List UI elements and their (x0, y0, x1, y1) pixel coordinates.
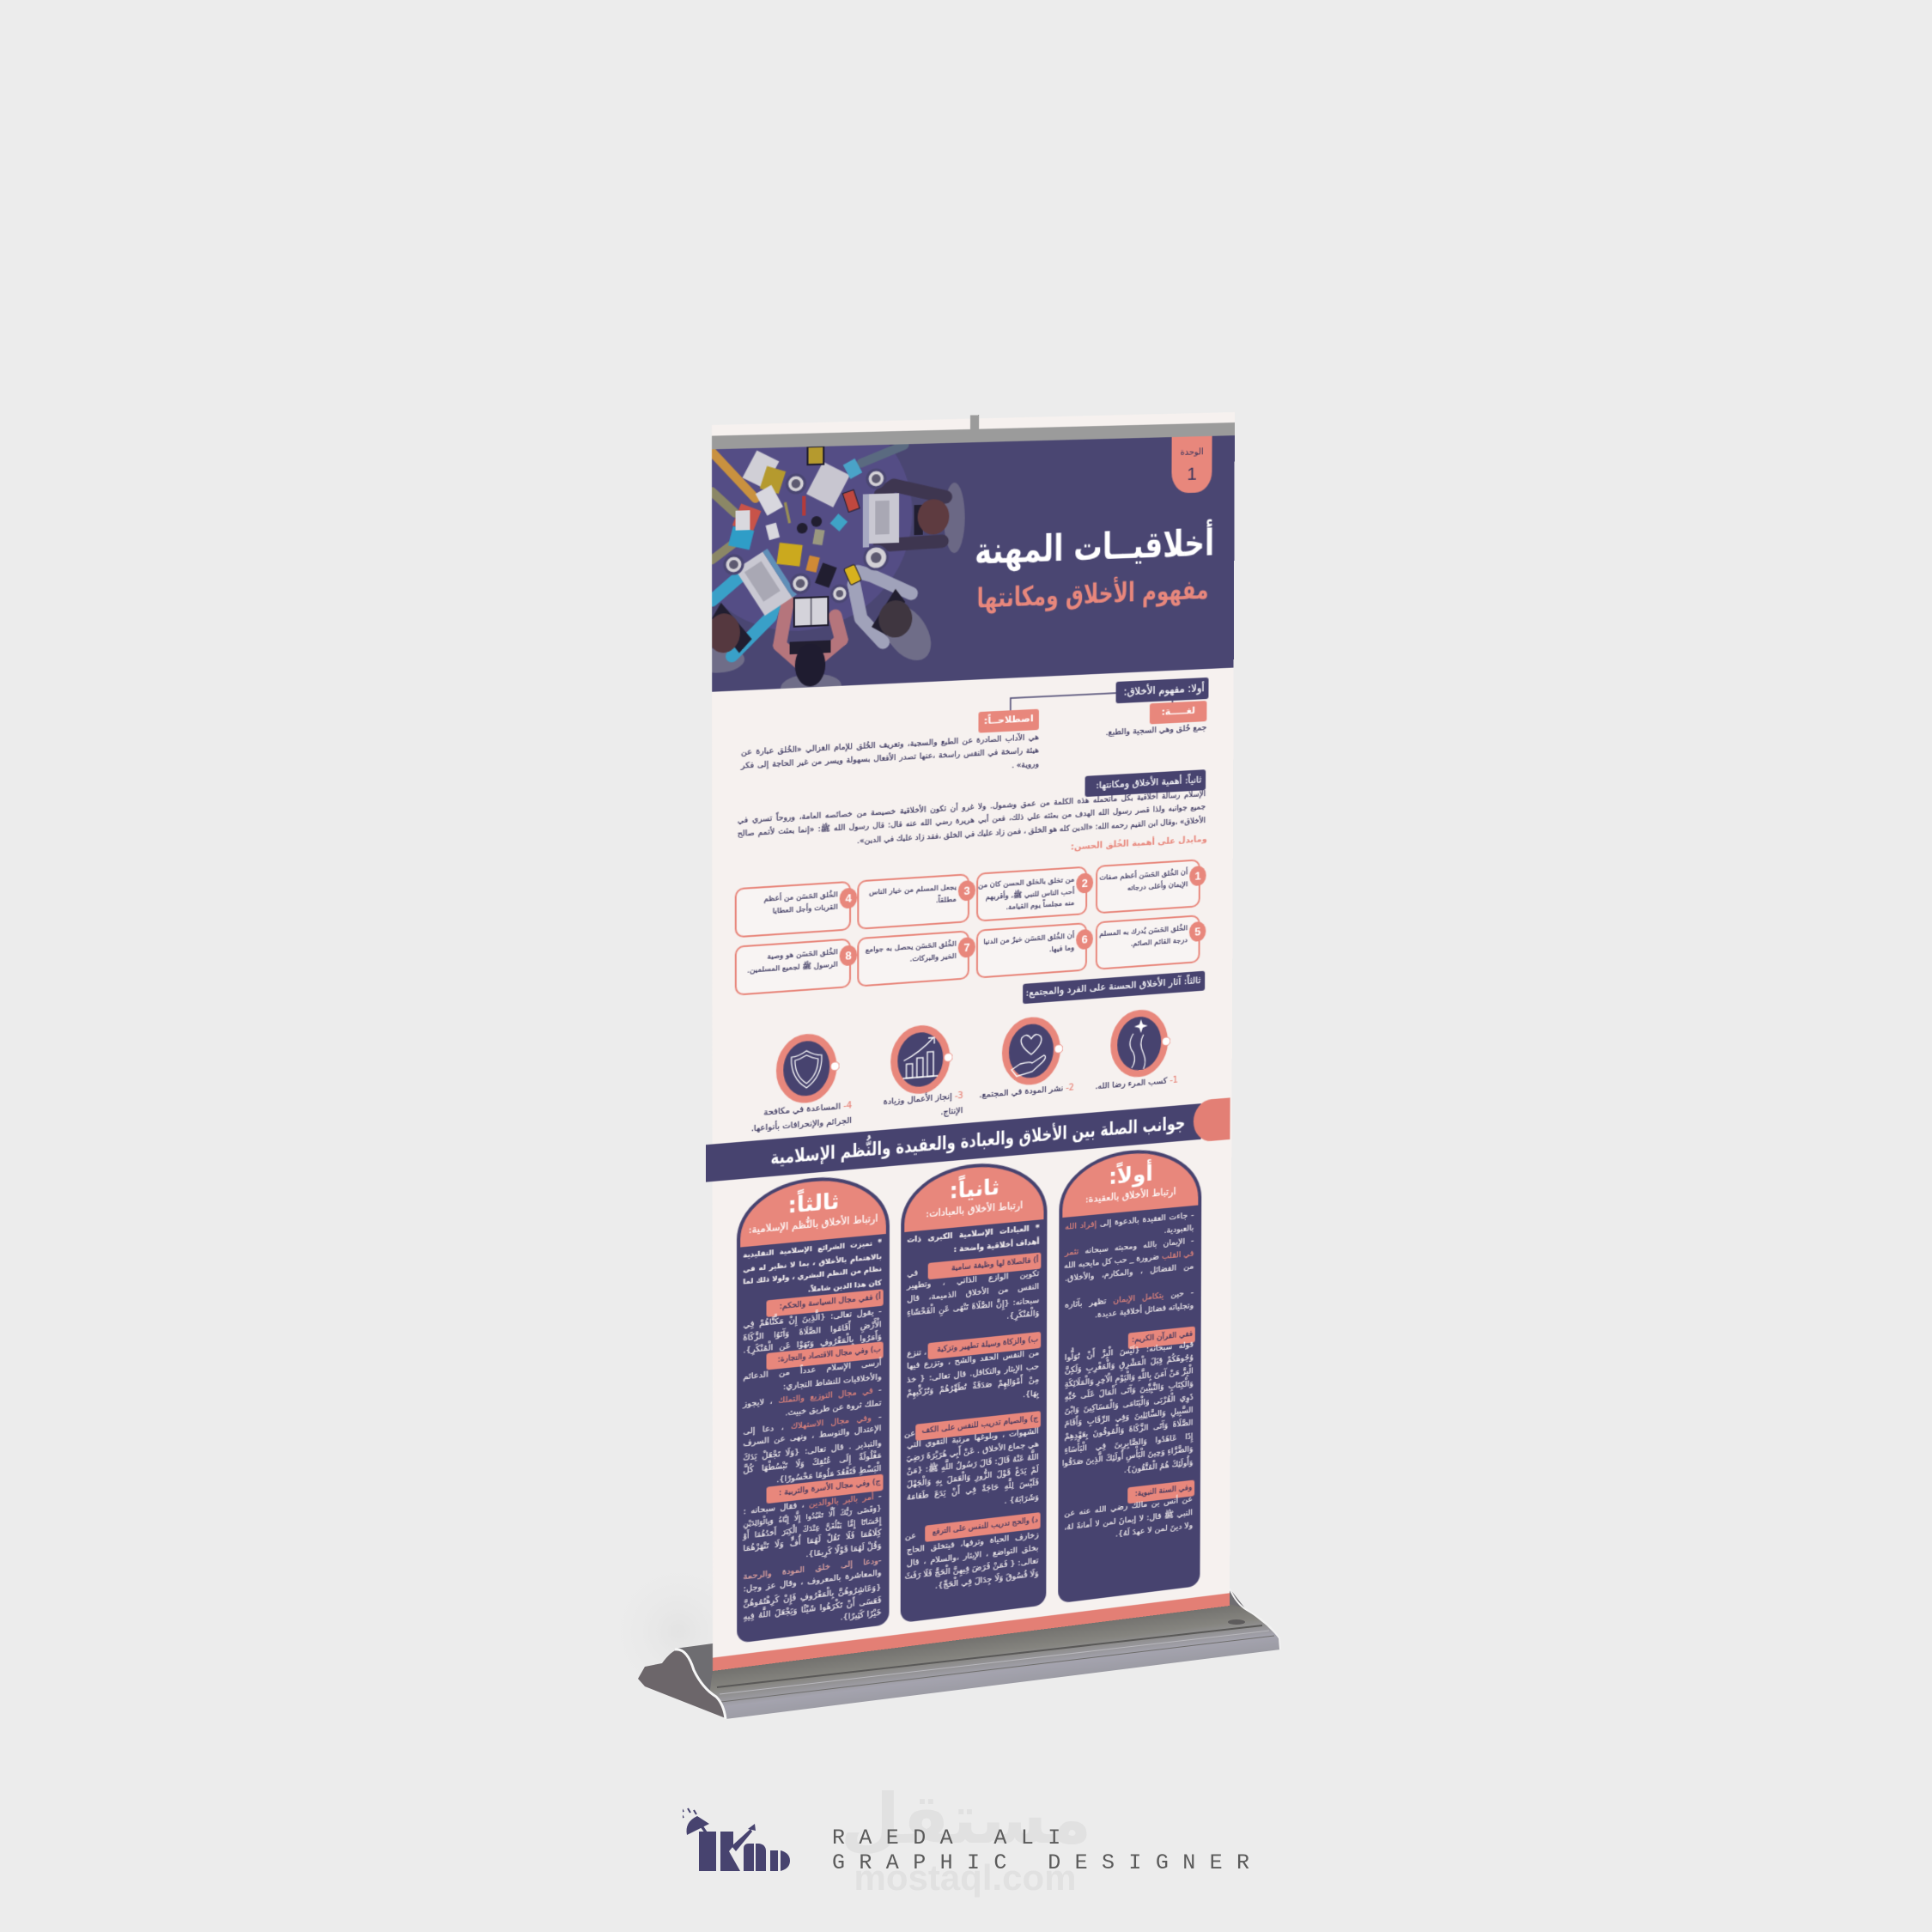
column 3: systems: -ودعا إلى خلق المودة والرحمة (743, 1556, 881, 1582)
column 1: creed: وتجلياته فضائل أخلاقية عديدة. (1095, 1301, 1194, 1321)
importance paragraph (737, 790, 1206, 846)
top rail (712, 422, 1235, 449)
label 4: الجرائم والإنحرافات بأنواعها. (751, 1116, 852, 1134)
person lower left (712, 575, 775, 657)
heading: section one (1116, 677, 1209, 703)
column 1: creed: - حين يتكامل الإيمان تظهر بآثاره (1065, 1288, 1194, 1310)
definition text: istilahan: هي الآداب الصادرة عن الطبع والسجية، وتعريف الخُلق للإمام الغزالي «الخُلق عبارة عن (741, 733, 1039, 757)
column 3: systems (737, 1171, 890, 1643)
box: quran (1128, 1327, 1195, 1349)
unit badge (1171, 436, 1212, 494)
bottom pink band (713, 1593, 1230, 1671)
column 1: creed: النبي ﷺ قال: لا إيمانَ لمن لا أمانةَ لهُ، (1064, 1508, 1193, 1533)
logo (683, 1808, 790, 1871)
box: family: ج) وفي مجال الأسرة والتربية : (779, 1478, 880, 1498)
column 1 header: ارتباط الأخلاق بالعقيدة: (1085, 1186, 1176, 1206)
arms (712, 445, 904, 560)
tag: lughatan: لغـــــة: (1162, 705, 1195, 718)
column 1: creed: وَالْكِتَابِ وَالنَّبِيِّينَ وَآتَى الْمَالَ عَلَى حُبِّهِ (1065, 1379, 1194, 1402)
box: prayer (928, 1253, 1041, 1279)
card 2 (976, 866, 1087, 922)
definition text: istilahan: وروية» . (1012, 760, 1039, 770)
column 2: worship: وَشَرَابَهُ} . (1005, 1492, 1039, 1506)
connector lines (1010, 692, 1174, 711)
column 2: worship: بخلق التواضع ، الإيثار ،والسلام ، قال (907, 1543, 1039, 1569)
column 1: creed: - جاءت العقيدة بالدعوة إلى إفراد الله (1065, 1211, 1194, 1232)
column 1: creed: في القلب ضرورة _ حب كل مايحبه الله (1064, 1249, 1194, 1271)
card 1: أن الخُلق الحَسَن أعظم صفات (1099, 867, 1188, 882)
column 3: systems: {وَقَضَى رَبُّكَ أَلَّا تَعْبُدُوا إِلَّا إِيَّاهُ وَبِالْوَالِدَيْنِ (743, 1504, 881, 1528)
column 2: worship: بِهَا}. (1023, 1388, 1039, 1400)
column 1: creed: وَالضَّرَّاءِ وَحِينَ الْبَأْسِ أُولَئِكَ الَّذِينَ صَدَقُوا (1062, 1444, 1193, 1468)
column 2: worship: زخارف الحياة وترفها، فيتخلق الحاج (907, 1530, 1039, 1556)
column 3: systems: {وَعَاشِرُوهُنَّ بِالْمَعْرُوفِ فَإِنْ كَرِهْتُمُوهُنَّ (743, 1583, 881, 1609)
top hanger notch (970, 415, 979, 431)
column 3 header: ارتباط الأخلاق بالنُّظم الإسلامية: (749, 1212, 878, 1236)
column 3: systems: إِحْسَانًا إِمَّا يَبْلُغَنَّ عِنْدَكَ الْكِبَرَ أَحَدُهُمَا أَوْ (743, 1516, 881, 1541)
column 2: worship: النفس من الأخلاق الذميمة، قال (907, 1282, 1039, 1304)
card 3: مطلقاً. (936, 894, 957, 904)
label 4: 4- المساعدة في مكافحة (763, 1101, 852, 1118)
column 2: worship: من النفس الحقد والشح ، وتزرع فيها (907, 1348, 1039, 1371)
banner (712, 412, 1235, 1671)
column 3: systems: بالاهتمام بالأخلاق ، بما لا نظير له في (743, 1252, 882, 1273)
box: fasting (915, 1411, 1041, 1441)
column 3: systems: الْبَسْطِ فَتَقْعُدَ مَلُومًا مَحْسُورًا}. (776, 1464, 881, 1485)
column 2: worship: أهداف أخلاقية واضحة : (954, 1238, 1039, 1255)
importance paragraph: جميع جوانبه ولذا قصر رسول الله الهدف من بعثته علي ذلك، فعن أبي هريرة رضي الله عنه قال: قال رسول الله ﷺ: «إنما بعثت لأتمم صالح (738, 803, 1206, 839)
tag: lughatan (1150, 701, 1206, 724)
person bottom (780, 597, 841, 670)
column 3: systems: * تميزت الشرائع الإسلامية التقليدية (743, 1237, 882, 1260)
card 5 (1096, 914, 1200, 970)
column 1: creed: ولا دينَ لمن لا عهدَ لَهُ}. (1115, 1521, 1193, 1540)
column 1: creed: الْبِرَّ مَنْ آمَنَ بِاللَّهِ وَالْيَوْمِ الْآخِرِ وَالْمَلَائِكَةِ (1065, 1366, 1194, 1389)
column 2: worship: تعالى: { فَمَنْ فَرَضَ فِيهِنَّ الْحَجَّ فَلَا رَفَثَ (904, 1556, 1039, 1582)
card 8: 8 (845, 949, 852, 963)
column 3: systems: نظام من النظم البشري ، ولولا ذلك لما (743, 1264, 882, 1286)
column 3: systems: - وفي مجال الاستهلاك ، دعا إلى (743, 1413, 882, 1437)
header panel (712, 435, 1235, 692)
label 2: 2- نشر المودة في المجتمع. (979, 1083, 1074, 1100)
column 2: worship: مِنْ أَمْوَالِهِمْ صَدَقَةً تُطَهِّرُهُمْ وَتُزَكِّيهِمْ (907, 1375, 1039, 1398)
column 2 header: ثانياً: (950, 1174, 999, 1204)
column 2: worship: سبحانه: {إِنَّ الصَّلَاةَ تَنْهَى عَنِ الْفَحْشَاءِ (907, 1296, 1039, 1318)
icon: growth chart (890, 1025, 953, 1094)
column 1: creed: الصَّلَاةَ وَآتَى الزَّكَاةَ وَالْمُوفُونَ بِعَهْدِهِمْ (1065, 1419, 1194, 1442)
card 6: 6 (1081, 933, 1088, 946)
card 8 (735, 939, 851, 996)
column 3: systems: وَقُلْ لَهُمَا قَوْلًا كَرِيمًا}. (805, 1541, 881, 1559)
column 3: systems: - أمر بالبر بالوالدين ، فقال سبحانه : (743, 1492, 881, 1517)
column 1: creed: قوله سبحانه: {لَيْسَ الْبِرَّ أَنْ تُوَلُّوا (1065, 1340, 1194, 1363)
column 1: creed: ذَوِي الْقُرْبَى وَالْيَتَامَى وَالْمَسَاكِينَ وَابْنَ (1065, 1393, 1194, 1416)
unit badge: 1 (1187, 464, 1197, 484)
column 3: systems: - في مجال التوزيع والتملك ، لايجوز (743, 1385, 882, 1409)
column 2: worship: اللَّهُ عَنْهُ قَالَ: قَالَ رَسُولُ اللَّهِ ﷺ: {مَنْ (907, 1452, 1039, 1477)
card 4 (735, 881, 851, 938)
column 2: worship: وَالْمُنْكَرِ}. (1006, 1309, 1039, 1321)
label 3 (883, 1073, 1151, 1118)
column 2 header: ارتباط الأخلاق بالعبادات: (926, 1200, 1023, 1220)
box: hajj (925, 1512, 1041, 1542)
column 3: systems: والمعاشرة بالمعروف ، وقال عز وجل: (743, 1568, 881, 1595)
box: family (767, 1474, 884, 1504)
watermark: mostaql: مستقل (841, 1779, 1091, 1859)
box: fasting: ج) والصيام تدريب للنفس على الكف (922, 1414, 1038, 1436)
column 3: systems: كان هذا الدين شاملاً. (808, 1278, 882, 1294)
box: politics: أ) ففي مجال السياسة والحكم: (780, 1293, 881, 1311)
card 4: الخُلق الحَسَن من أعظم (763, 890, 838, 903)
card 1: 1 (1194, 869, 1200, 883)
card 7: 7 (963, 940, 970, 954)
title: أخلاقيــات المهنة (975, 521, 1214, 573)
illustration: team around table (711, 444, 965, 689)
column 2: worship: تكوين الوازع الذاتي ، وتطهير (907, 1269, 1039, 1291)
card 2: 2 (1082, 877, 1088, 890)
column 3: systems: الإعتدال والتوسط ، ونهى عن السرف (743, 1424, 882, 1449)
ribbon pink cap (1194, 1097, 1230, 1143)
column 2: worship: فَلَيْسَ لِلَّهِ حَاجَةٌ فِي أَنْ يَدَعَ طَعَامَهُ (907, 1478, 1039, 1503)
card 3: 3 (963, 884, 970, 897)
heading: section one: أولا: مفهوم الأخلاق: (1124, 682, 1205, 698)
card 7: الخُلق الحَسَن يحصل به جوامع (866, 939, 957, 954)
box: quran: ففي القرآن الكريم: (1132, 1330, 1193, 1345)
column 3: systems: أرسى الإسلام عدداً من الدعائم (743, 1358, 882, 1382)
column 2 header (904, 1162, 1044, 1232)
tag: istilahan: اصطلاحــاً: (984, 713, 1034, 726)
label 1: 1- كسب المرء رضا الله. (1095, 1076, 1178, 1091)
pink subheading: ومايدل على أهمية الخُلق الحسن: (1071, 835, 1207, 853)
ribbon (706, 1103, 1201, 1182)
card 7: الخير والبركات. (910, 951, 957, 963)
column 3: systems: والأخلاقيات للنشاط التجاري: (783, 1372, 882, 1392)
column 1: creed (1058, 1145, 1202, 1603)
person right (878, 483, 945, 545)
column 3: systems: تملك ثروة عن طريق خبيث. (785, 1399, 882, 1419)
card 8: الخُلق الحَسَن هو وصية (767, 947, 838, 961)
watermark: mostaql (841, 1779, 1091, 1898)
box: sunnah: وفي السنة النبوية: (1135, 1484, 1192, 1498)
laptop lower left (735, 549, 797, 616)
column 3: systems: مَغْلُولَةً إِلَى عُنُقِكَ وَلَا تَبْسُطْهَا كُلَّ (743, 1450, 882, 1475)
column 1: creed: عن أنس بن مالك رضي الله عنه عن (1064, 1494, 1193, 1519)
column 1: creed: بالعبودية. (1164, 1224, 1194, 1236)
box: hajj: د) والحج تدريب للنفس على الترفع (933, 1516, 1038, 1537)
column 1: creed: إِذَا عَاهَدُوا وَالصَّابِرِينَ فِي الْبَأْسَاءِ (1065, 1431, 1193, 1455)
glasses (797, 516, 822, 534)
card 7 (857, 930, 969, 987)
column 2: worship: حب الإيثار والتكافل. قال تعالى: { خذ (907, 1362, 1039, 1385)
card 6 (976, 922, 1087, 979)
card 6: أن الخُلق الحَسَن خيرٌ من الدنيا (983, 931, 1074, 946)
designer role: GRAPHIC DESIGNER (832, 1850, 1263, 1875)
column 3 header: ثالثاً: (788, 1188, 839, 1218)
icon: shield (776, 1034, 840, 1103)
column 3 header (740, 1176, 886, 1248)
label 4 (751, 1073, 1151, 1134)
person lower right (854, 569, 911, 644)
laptop right (863, 494, 869, 548)
icon: hand holding heart (1001, 1017, 1063, 1085)
card 5: الخُلق الحَسَن يُدرك به المسلم (1099, 923, 1188, 938)
card 4: القربات وأجل العطايا (773, 902, 838, 914)
box: politics (767, 1289, 884, 1317)
card 1 (1096, 859, 1200, 914)
box: zakat (928, 1332, 1041, 1359)
coffee cups (725, 470, 888, 606)
column 1 header (1062, 1148, 1199, 1218)
box: zakat: ب) والزكاة وسيلة تطهير وتزكية (937, 1335, 1038, 1354)
column 1 header: أولاً: (1109, 1161, 1153, 1189)
column 2: worship: لَمْ يَدَعْ قَوْلَ الزُّورِ وَالْعَمَلَ بِهِ وَالْجَهْلَ (907, 1465, 1039, 1490)
column 1: creed: وُجُوهَكُمْ قِبَلَ الْمَشْرِقِ وَالْمَغْرِبِ وَلَكِنَّ (1065, 1352, 1194, 1376)
column 1: creed: - الإيمان بالله ومحبته سبحانه تثمر (1065, 1236, 1194, 1258)
column 1: creed: السَّبِيلِ وَالسَّائِلِينَ وَفِي الرِّقَابِ وَأَقَامَ (1065, 1406, 1194, 1429)
column 3: systems: خَيْرًا كَثِيرًا}. (840, 1608, 881, 1623)
card 2: منه مجلساً يوم القيامة. (1005, 898, 1074, 911)
heading: section two (1085, 769, 1206, 797)
column 2: worship: وَلَا فُسُوقَ وَلَا جِدَالَ فِي الْحَجِّ}. (935, 1569, 1038, 1591)
unit badge: الوحدة (1181, 447, 1204, 458)
column 3: systems: وَأَمَرُوا بِالْمَعْرُوفِ وَنَهَوْا عَنِ الْمُنْكَرِ}. (743, 1332, 882, 1356)
icon: raised hands (1110, 1010, 1171, 1078)
column 2: worship: في (907, 1268, 918, 1279)
box: prayer: أ) فالصلاة لها وظيفة سامية (951, 1256, 1038, 1273)
card 5: درجة القائم الصائم. (1131, 935, 1188, 947)
subtitle: مفهوم الأخلاق ومكانتها (977, 574, 1209, 615)
card 1: الإيمان وأعلى درجاته (1127, 879, 1188, 891)
label 3: 3- إنجاز الأعمال وزيادة (884, 1091, 963, 1107)
column 2: worship (901, 1157, 1048, 1623)
watermark: mostaql: mostaql.com (854, 1857, 1077, 1898)
box: economy (767, 1341, 884, 1370)
card 2: أحب الناس للنبي ﷺ، وأقربهم (986, 886, 1074, 901)
column 3: systems: - يقول تعالى: {الَّذِينَ إِنْ مَكَّنَّاهُمْ فِي (743, 1307, 882, 1330)
card 3 (857, 873, 969, 930)
box: sunnah (1127, 1479, 1194, 1504)
heading: section two: ثانياً: أهمية الأخلاق ومكانتها: (1096, 774, 1201, 791)
box: economy: ب) وفي مجال الاقتصاد والتجارة: (778, 1346, 881, 1364)
chairs (944, 483, 965, 554)
column 1: creed: وَأُولَئِكَ هُمُ الْمُتَّقُونَ}. (1124, 1458, 1193, 1475)
column 2: worship: الشهوات ، وبلوغها مرتبة التقوى التي (907, 1426, 1039, 1450)
designer name: RAEDA ALI (832, 1826, 1075, 1850)
definition text: lughatan: جمع خُلق وهي السجية والطبع. (1106, 723, 1206, 738)
column 2: worship: ، تنزع (907, 1347, 927, 1359)
importance paragraph: الأخلاق» ،وقال ابن القيم رحمه الله: «الدين كله هو الخلق ، فمن زاد عليك في الخلق ،فقد زاد عليك في الدين». (857, 817, 1206, 846)
column 3: systems: كِلَاهُمَا فَلَا تَقُلْ لَهُمَا أُفٍّ وَلَا تَنْهَرْهُمَا (743, 1528, 881, 1554)
label 3: الإنتاج. (940, 1106, 963, 1117)
column 2: worship: * العبادات الإسلامية الكبرى ذات (907, 1224, 1039, 1245)
importance paragraph: الإسلام رسالة أخلاقية بكل ماتحمله هذه الكلمة من عمق وشمول. ولا غرو أن تكون الأخلاقية خصيصة من خصائصه العامة، وروحاً تسري في (738, 790, 1206, 825)
card 8: الرسول ﷺ لجميع المسلمين. (747, 959, 838, 974)
definition text: istilahan (740, 732, 1039, 771)
card 3: يجعل المسلم من خيار الناس (869, 882, 957, 896)
column 3: systems: فَعَسَى أَنْ تَكْرَهُوا شَيْئًا وَيَجْعَلَ اللَّهُ فِيهِ (744, 1596, 881, 1622)
column 1: creed: من الفضائل ، والمكارم، والأخلاق. (1065, 1261, 1194, 1284)
card 4: 4 (845, 891, 852, 905)
card 2: من تخلق بالخلق الحسن كان من (978, 875, 1074, 890)
definition text: istilahan: هيئة راسخة في النفس راسخة ،عنها تصدر الأفعال بسهولة ويسر من غير الحاجة إلى فكر (741, 747, 1039, 771)
card 5: 5 (1194, 925, 1200, 939)
table items (806, 462, 850, 507)
tag: istilahan (978, 709, 1039, 733)
column 2: worship: هي جماع الأخلاق . عَنْ أَبِي هُرَيْرَةَ رَضِيَ (906, 1439, 1039, 1463)
column 3: systems: والتبذير . قال تعالى: {وَلَا تَجْعَلْ يَدَكَ (743, 1438, 882, 1463)
heading: section three: ثالثاً: آثار الأخلاق الحسنة على الفرد والمجتمع: (1026, 975, 1200, 999)
card 6: وما فيها. (1049, 943, 1074, 953)
column 2: worship: عن (904, 1429, 915, 1439)
column 3: systems: الْأَرْضِ أَقَامُوا الصَّلَاةَ وَآتَوُا الزَّكَاةَ (743, 1320, 882, 1343)
heading: section three (1023, 971, 1205, 1004)
ribbon heading: جوانب الصلة بين الأخلاق والعبادة والعقيدة والنُّظم الإسلامية (770, 1113, 1185, 1169)
column 2: worship: عن (905, 1531, 916, 1542)
